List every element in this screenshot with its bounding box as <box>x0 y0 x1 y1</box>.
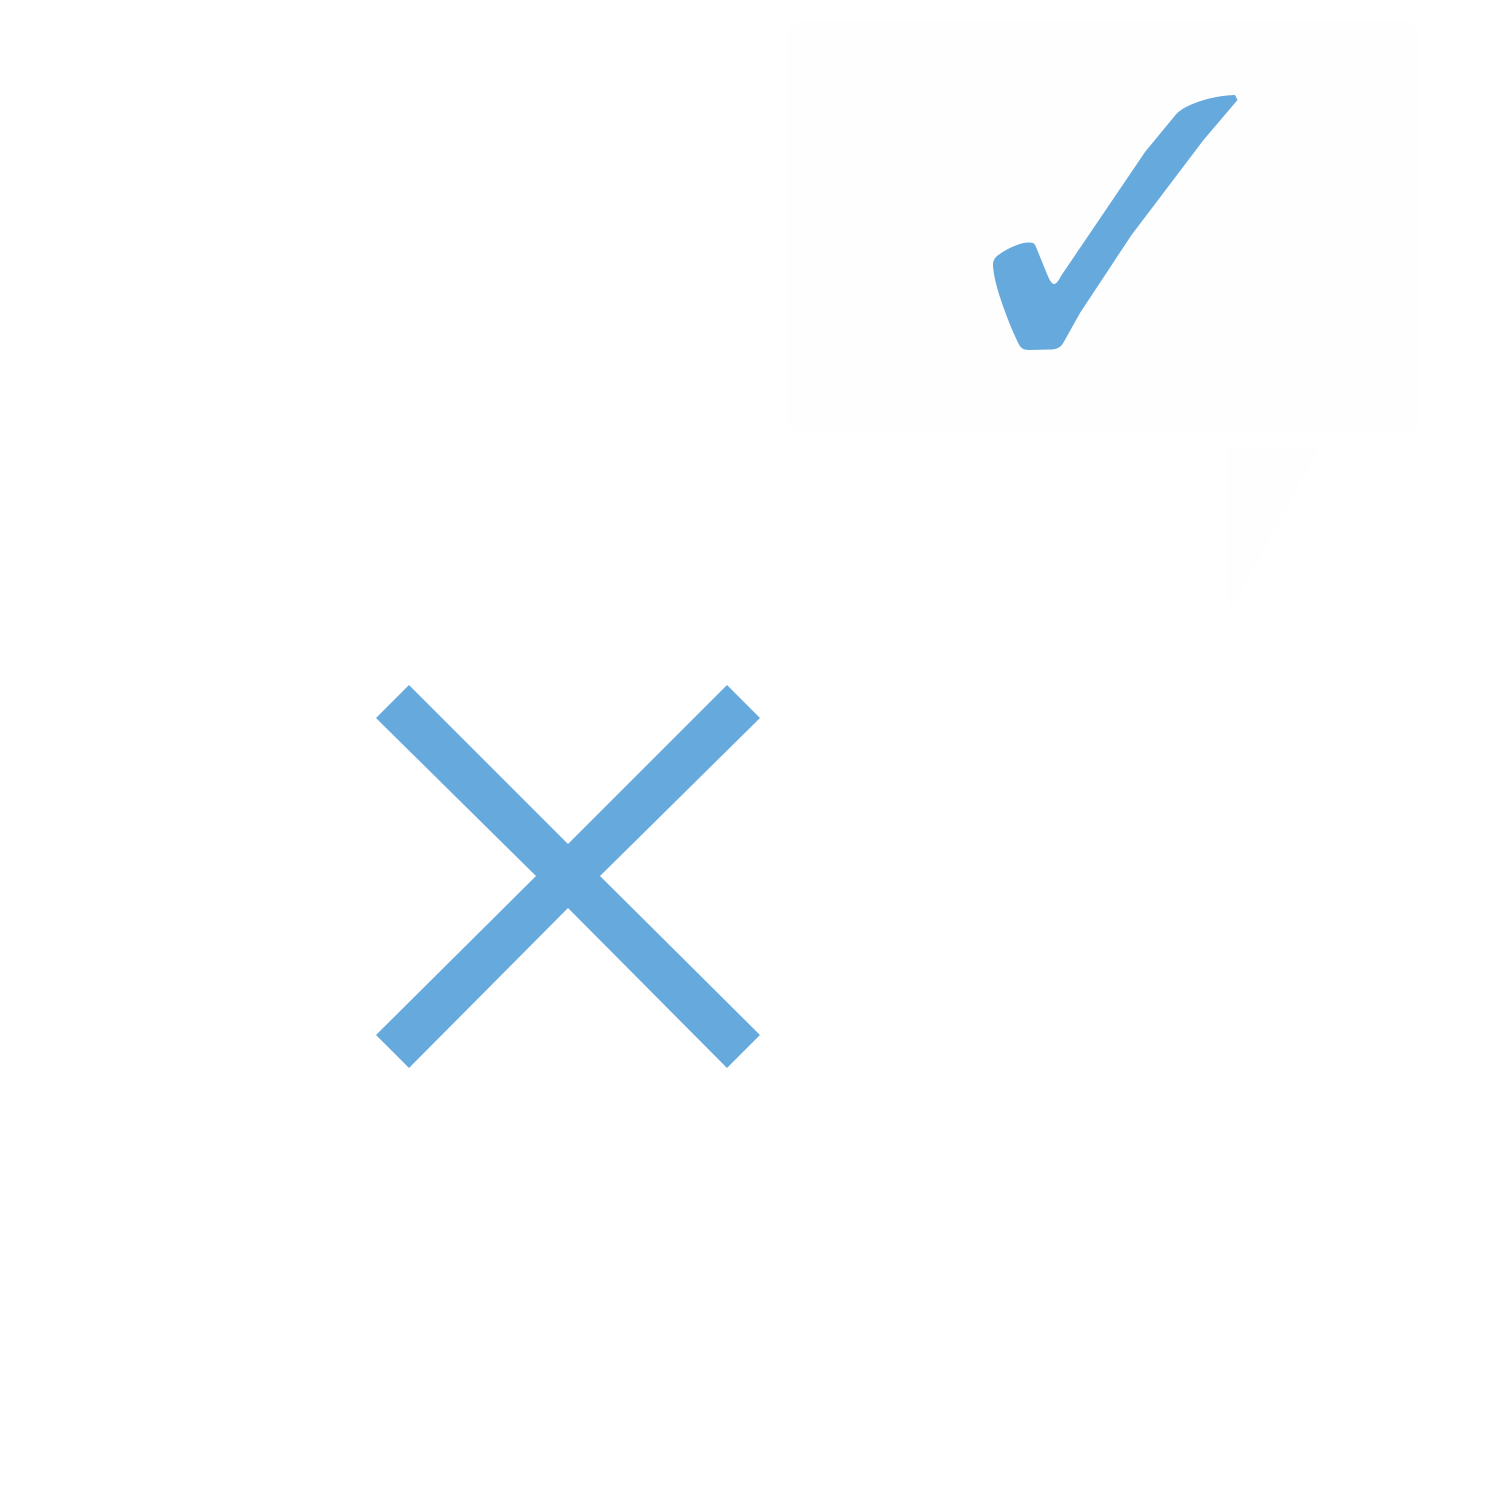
panel: faint speech bubble behind check mark <box>787 20 1420 615</box>
icon: cross mark <box>376 685 760 1068</box>
icon: check mark <box>993 95 1238 350</box>
